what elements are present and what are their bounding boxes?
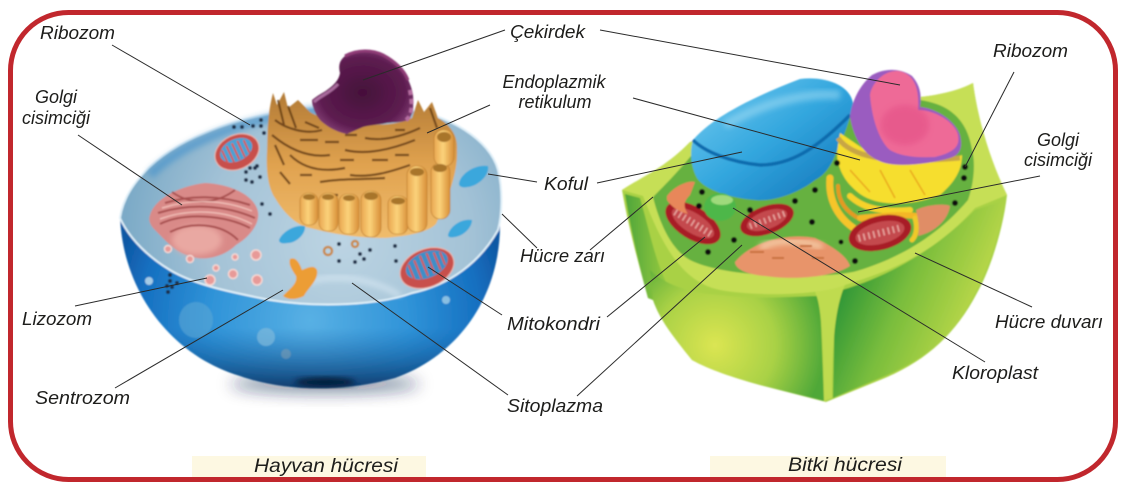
label: Kloroplast: Kloroplast [952, 363, 1039, 383]
small vesicles [324, 241, 358, 255]
label: Koful: Koful [544, 174, 589, 194]
er tubes [300, 130, 454, 237]
rim [622, 83, 1007, 294]
endoplasmic reticulum yellow [837, 133, 962, 204]
label: Golgi cisimciği (animal): Golgi [35, 87, 78, 107]
cell bowl [120, 215, 500, 388]
shadow under cell [230, 375, 420, 393]
ribosomes plant [696, 160, 968, 264]
label: Sentrozom: Sentrozom [35, 388, 130, 408]
surface highlights [150, 110, 320, 175]
label: Hücre zarı: Hücre zarı [520, 246, 605, 266]
golgi body [149, 183, 258, 258]
side faces [625, 194, 670, 300]
illustration: animal cell [120, 51, 501, 393]
caption: Hayvan hücresi: Hayvan hücresi [254, 456, 399, 477]
label: Lizozom: Lizozom [22, 309, 92, 329]
nucleus plant [850, 70, 961, 165]
label: Ribozom (animal): Ribozom [40, 23, 115, 43]
mitochondria plant [658, 193, 915, 257]
mitochondrion upper [209, 127, 265, 177]
label: Endoplazmik retikulum: retikulum [518, 92, 592, 112]
nucleus [312, 51, 413, 134]
golgi yellow stacks [830, 178, 916, 240]
caption: Bitki hücresi: Bitki hücresi [788, 455, 903, 476]
centrosome [283, 258, 317, 299]
vacuole [691, 78, 853, 200]
label: Golgi cisimciği (plant): cisimciği [1024, 150, 1093, 170]
illustration: plant cell [622, 70, 1007, 402]
chloroplast [704, 193, 736, 221]
orange plastids [667, 182, 950, 278]
label: Golgi cisimciği (plant): Golgi [1037, 130, 1080, 150]
caption backgrounds [192, 456, 946, 477]
cell interior [653, 100, 974, 276]
label: Golgi cisimciği (animal): cisimciği [22, 108, 91, 128]
ribosomes [165, 118, 398, 294]
leader lines [75, 30, 1040, 396]
label: Hücre duvarı: Hücre duvarı [995, 312, 1103, 332]
label: Mitokondri: Mitokondri [507, 314, 601, 334]
endoplasmic reticulum [267, 92, 457, 238]
mitochondrion lower [394, 240, 460, 296]
vacuoles [279, 166, 488, 243]
cell wall [622, 83, 1007, 402]
label: Sitoplazma: Sitoplazma [507, 396, 603, 416]
label: Endoplazmik retikulum: Endoplazmik [502, 72, 607, 92]
cytoplasm surface [120, 106, 501, 304]
label: Çekirdek: Çekirdek [510, 22, 586, 42]
label: Ribozom (plant): Ribozom [993, 41, 1068, 61]
lysosomes [164, 246, 262, 285]
